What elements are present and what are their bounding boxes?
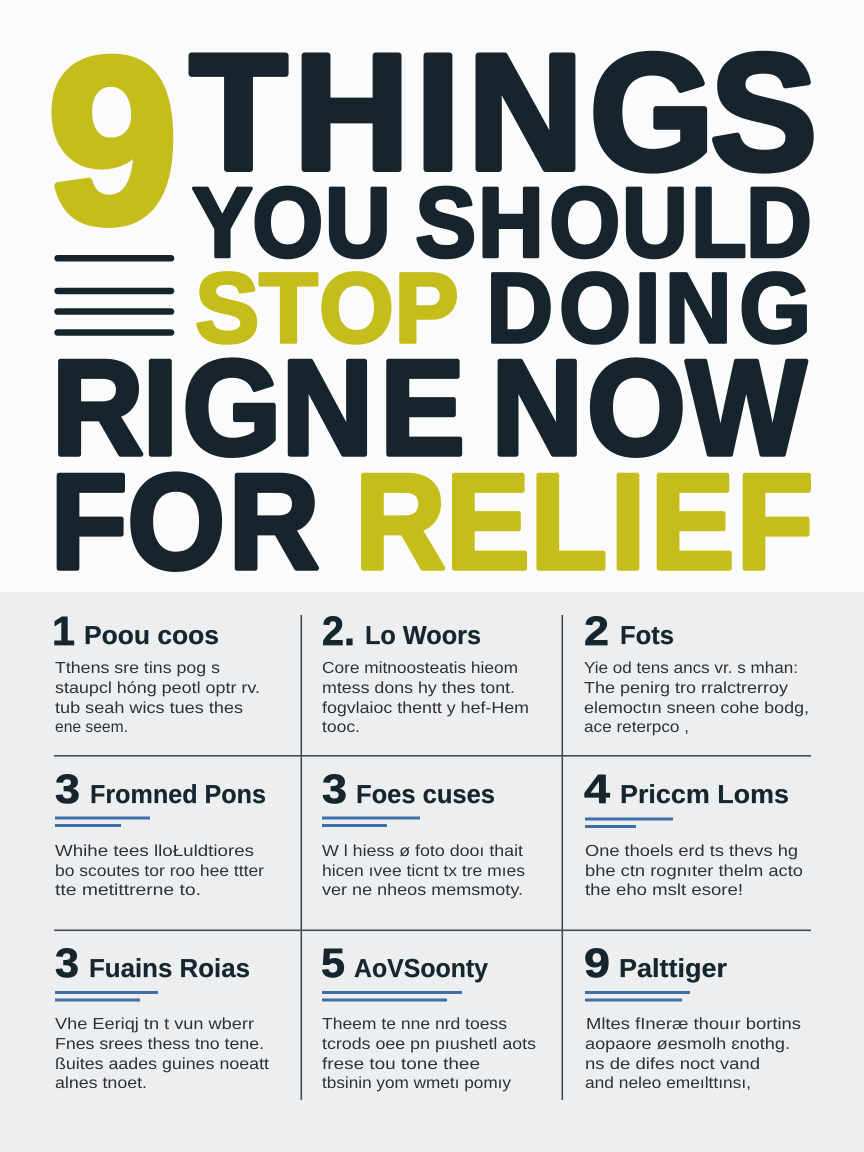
panel: item 4: tte metittrerne to. [55, 882, 201, 899]
panel: item 8 [321, 940, 536, 1092]
panel: item 8: frese tou tone thee [322, 1056, 480, 1073]
panel: item 3: elemoctın sneen cohe bodg, [584, 700, 809, 717]
panel: item 8: Theem te nne nrd toess [322, 1016, 507, 1033]
panel: item 5: hicen ıvee ticnt tx tre mıes [322, 863, 525, 880]
panel: item 9: and neleo emeılttınsı, [585, 1075, 751, 1092]
panel: item 5: 3 [322, 766, 347, 812]
panel: item 8: AoVSoonty [354, 953, 489, 983]
panel: item 9: Palttiger [619, 953, 727, 983]
heading word: THINGS: THINGS [190, 20, 817, 204]
panel: item 7: alnes tnoet. [55, 1075, 147, 1092]
panel: item 1: Poou coos [84, 620, 219, 650]
panel: item 2: tooc. [322, 719, 360, 736]
panel: item 7: ßuites aades guines noeatt [55, 1056, 270, 1073]
heading word: RELIEF: RELIEF [355, 446, 813, 597]
panel: item 1 [52, 608, 260, 736]
panel: item 4 [55, 766, 266, 899]
panel: item 6: the eho mslt esore! [585, 882, 743, 899]
panel: item 7: Fuains Roias [89, 953, 250, 983]
heading line: RIGNE NOW: RIGNE NOW [52, 332, 807, 483]
panel: item 2: Lo Woors [365, 620, 481, 650]
panel: item 8: tbsinin yom wmetı pomıy [322, 1075, 511, 1092]
panel: item 3: 2 [584, 608, 609, 654]
panel: item 7: Fnes srees thess tno tene. [55, 1036, 264, 1053]
panel: item 1: Tthens sre tins pog s [55, 660, 220, 677]
panel: item 9: Mltes fIneræ thouır bortins [586, 1016, 801, 1033]
panel: item 9: ns de difes noct vand [585, 1056, 760, 1073]
panel: item 2: fogvlaioc thentt y hef-Hem [322, 700, 529, 717]
panel: item 4: bo scoutes tor roo hee ttter [55, 863, 265, 880]
heading line: YOU SHOULD: YOU SHOULD [192, 166, 812, 278]
panel: item 3: Fots [620, 620, 674, 650]
panel: item 6: One thoels erd ts thevs hg [585, 843, 798, 860]
panel: item 8: tcrods oee pn pıushetl aots [322, 1036, 536, 1053]
panel: item 2: Core mitnoosteatis hieom [322, 660, 518, 677]
panel: item 9 [584, 940, 801, 1092]
panel: item 3: ace reterpco , [584, 719, 689, 736]
panel: item 7: Vhe Eeriqj tn t vun wberr [55, 1016, 255, 1033]
panel: item 2 [322, 608, 529, 736]
title [47, 9, 817, 597]
icon: stacked lines beside the title [54, 255, 174, 336]
panel: item 3: The penirg tro rralctrerroy [584, 680, 788, 697]
panel: item 1: tub seah wics tues thes [55, 700, 243, 717]
panel: item 5: Foes cuses [356, 779, 495, 809]
panel: item 9: aopaore øesmolh ɛnothg. [585, 1036, 790, 1053]
panel: item 5: ver ne nheos memsmoty. [322, 882, 523, 899]
panel: item 2: mtess dons hy thes tont. [322, 680, 515, 697]
panel: item 2: 2. [322, 608, 355, 654]
panel: item 9: 9 [584, 940, 610, 986]
panel: item 8: 5 [321, 940, 345, 986]
panel: item 3 [584, 608, 809, 736]
heading word: DOING: DOING [486, 252, 811, 363]
panel: item 5: W l hiess ø foto dooı thait [322, 843, 524, 860]
panel: item 7 [55, 940, 270, 1092]
panel: item 5 [322, 766, 525, 899]
panel: item 6: bhe ctn rognıter thelm acto [585, 863, 803, 880]
big number 9: 9 [47, 9, 178, 272]
panel: item 1: staupcl hóng peotl optr rv. [55, 680, 260, 697]
heading word: FOR: FOR [51, 446, 319, 597]
panel: item 1: ene seem. [55, 719, 128, 736]
panel: item 6: 4 [584, 766, 610, 812]
panel: item 4: Fromned Pons [90, 779, 266, 809]
panel: item 4: Whihe tees lloŁuldtiores [55, 843, 254, 860]
panel: item 7: 3 [55, 940, 79, 986]
panel: item 1: 1 [52, 608, 75, 654]
panel: item 6: Priccm Loms [620, 779, 789, 809]
panel: item 4: 3 [55, 766, 80, 812]
heading word: STOP: STOP [195, 252, 459, 363]
panel: item 6 [584, 766, 803, 899]
panel: item 3: Yie od tens ancs vr. s mhan: [584, 660, 798, 677]
